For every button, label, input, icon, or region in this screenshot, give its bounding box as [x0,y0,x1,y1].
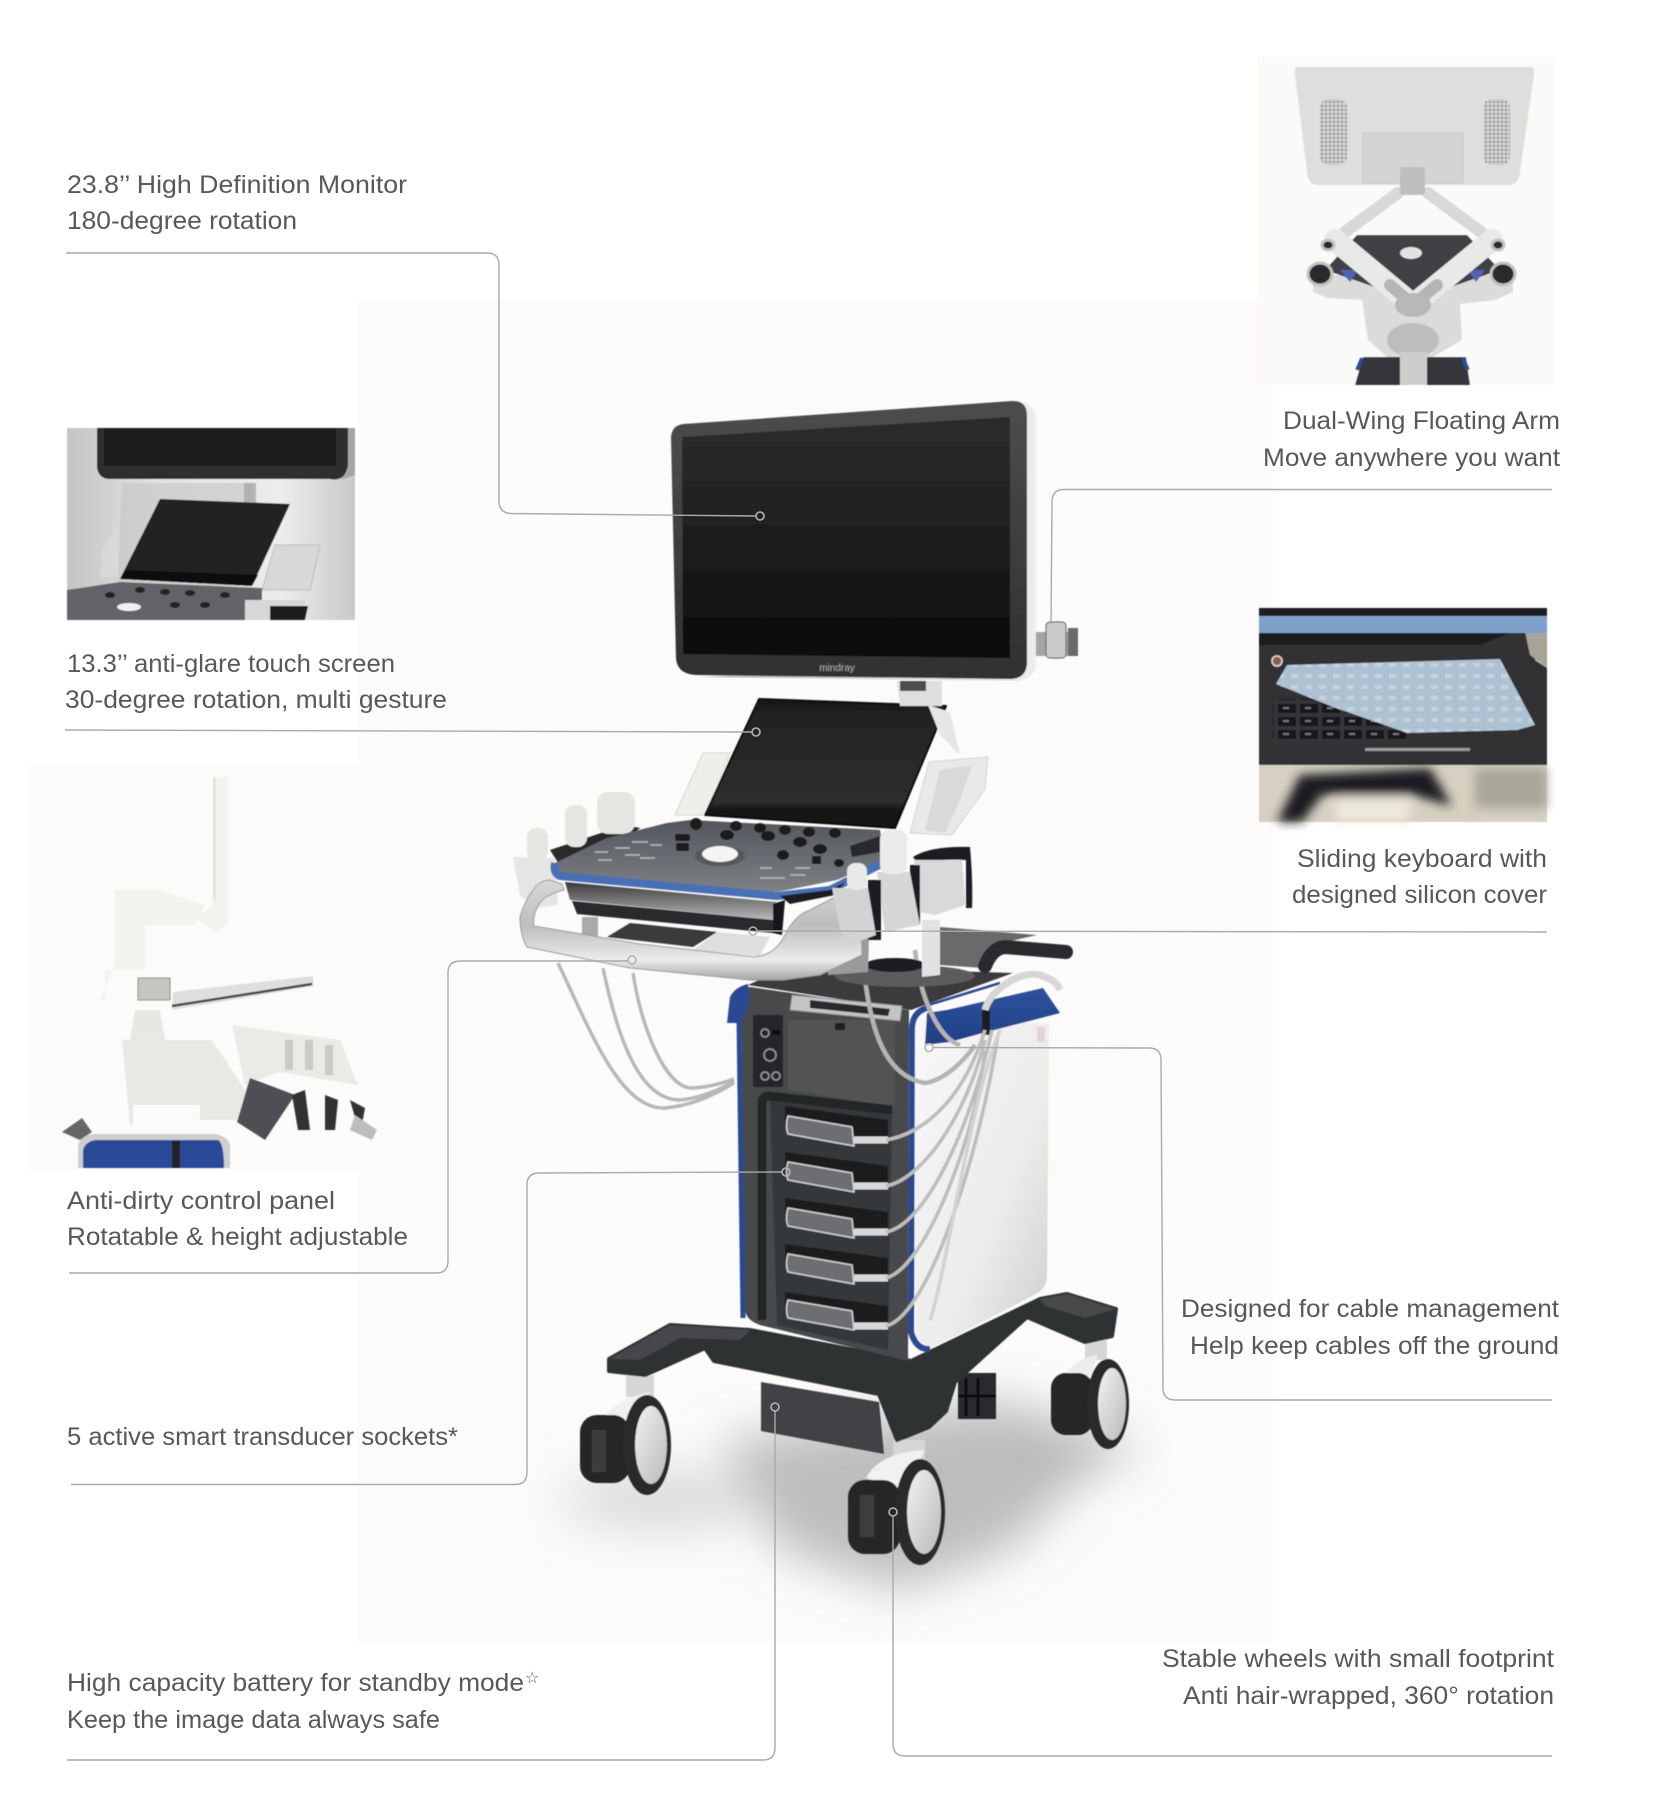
socket 4 [785,1244,888,1284]
photo: sliding keyboard [1259,608,1547,822]
callout: keyboard [749,927,1547,935]
label: wheels: Stable wheels with small footprint [1162,1645,1554,1673]
vent grille [958,1373,996,1419]
floor shadow [560,1400,1140,1590]
wheel: front centre [848,1450,945,1565]
callout: touch screen [65,728,760,736]
dark console [1325,235,1500,300]
control panel [555,818,885,904]
label: floating arm [1263,407,1560,472]
socket 5 [785,1292,888,1330]
label: cable management [1181,1295,1559,1360]
upper recess panel [788,1020,895,1107]
cart base [1355,357,1470,385]
side shelves [675,753,988,835]
managed cables [862,950,1060,1326]
label: monitor: 180-degree rotation [67,207,297,235]
right probes and holders [832,830,972,945]
socket 3 [785,1198,888,1238]
silver handle frame [520,880,862,980]
wheel: front left [580,1392,671,1495]
label: battery: ☆ [525,1670,539,1687]
label: monitor [67,171,407,235]
support column and rear handle [826,905,1066,987]
socket 1 [785,1106,888,1146]
cabinet: white side panel [914,1018,1049,1347]
callout: floating arm [1051,490,1552,624]
monitor hinge [1036,622,1078,658]
photo: touch screen rotation [67,428,355,620]
callout: transducer sockets [71,1168,790,1484]
transducer sockets [785,1106,888,1330]
label: control panel: Rotatable & height adjustable [67,1223,408,1251]
socket 2 [785,1152,888,1192]
wheel stems [626,1340,1107,1460]
monitor back [1295,67,1534,185]
label: battery: Keep the image data always safe [67,1706,440,1734]
gel dock [790,995,902,1021]
label: battery: High capacity battery for standby mode [67,1669,524,1697]
ultrasound system [513,400,1129,1565]
trackball [702,846,738,862]
blue cable-management strip [925,988,1060,1045]
cabinet top deck [748,966,1013,1010]
label: battery [67,1669,539,1734]
touch screen [705,699,946,828]
label: cable management: Designed for cable management [1181,1295,1559,1323]
label: keyboard: Sliding keyboard with [1297,845,1547,873]
label: touch screen: 13.3’’ anti-glare touch screen [67,650,395,678]
label: wheels: Anti hair-wrapped, 360° rotation [1183,1682,1554,1710]
callout: control panel [69,956,636,1273]
label: control panel [67,1187,408,1251]
left hanging cables [558,963,734,1108]
bezel [671,401,1027,679]
label: touch screen: 30-degree rotation, multi gesture [65,686,447,714]
label: keyboard: designed silicon cover [1292,881,1547,909]
label: transducer sockets: 5 active smart transducer sockets* [67,1423,458,1451]
callout: battery [67,1403,779,1760]
photo: control panel side view [62,777,377,1168]
label: control panel: Anti-dirty control panel [67,1187,335,1215]
battery compartment [761,1382,884,1454]
monitor neck [897,681,960,755]
cabinet: dark front [741,987,909,1361]
keyboard drawer [565,882,785,956]
cup holders [1308,240,1515,285]
lower tray [1313,275,1513,357]
arm wings [1335,193,1492,305]
label: monitor: 23.8’’ High Definition Monitor [67,171,407,199]
callout: cable management [925,1044,1552,1400]
label: floating arm: Dual-Wing Floating Arm [1283,407,1560,435]
label: keyboard [1292,845,1547,909]
wheel: right [1051,1355,1129,1449]
photo: dual-wing floating arm [1257,56,1555,385]
callout: wheels [889,1508,1552,1756]
callout: monitor [66,253,764,520]
cart base [609,1294,1116,1440]
transducer bay [770,1098,892,1350]
monitor [671,400,1036,681]
brand: mindray [819,663,855,674]
speaker grilles [1320,99,1510,165]
silver rim [700,400,1036,681]
label: floating arm: Move anywhere you want [1263,444,1560,472]
knobs [675,818,844,867]
silicone cover [1276,659,1535,733]
left probes and holders [513,792,640,908]
label: touch screen [65,650,447,714]
label: wheels [1162,1645,1554,1710]
screen [682,417,1010,658]
I/O panel [753,1015,783,1087]
label: cable management: Help keep cables off the ground [1190,1332,1559,1360]
blurred floor with dark arch [1277,768,1547,822]
